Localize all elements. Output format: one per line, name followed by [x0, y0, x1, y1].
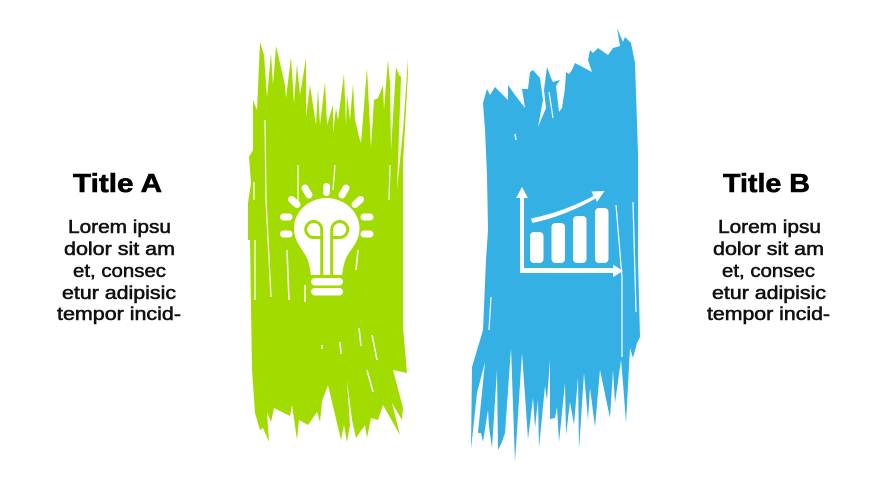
bulb rays [284, 186, 370, 234]
text block: Title B body [707, 217, 830, 324]
text block: Title A body: tempor incid- [57, 304, 181, 324]
brush scratches [254, 120, 390, 392]
panel: Title A text [57, 168, 181, 324]
heading: Title A: Title A [73, 168, 162, 198]
text block: Title B body: dolor sit am [713, 239, 824, 259]
text block: Title B body: etur adipisic [712, 283, 826, 303]
bulb body [294, 198, 360, 275]
panel: blue brush stroke [471, 28, 640, 462]
text block: Title B body: tempor incid- [707, 304, 830, 324]
vertical axis [516, 187, 623, 277]
text block: Title A body: dolor sit am [64, 239, 175, 259]
panel: Title B text [707, 168, 830, 324]
text block: Title A body [57, 217, 181, 324]
bulb base [311, 278, 343, 286]
text block: Title A body: Lorem ipsu [68, 217, 171, 237]
icon: growth bar chart [516, 187, 623, 277]
panel: green brush stroke [248, 42, 408, 442]
bulb filament [306, 222, 348, 275]
text block: Title B body: et, consec [722, 261, 815, 281]
heading: Title B: Title B [723, 168, 810, 198]
text block: Title B body: Lorem ipsu [718, 217, 821, 237]
bars [530, 208, 608, 263]
text block: Title A body: etur adipisic [62, 283, 176, 303]
icon: light bulb [284, 186, 370, 296]
trend arrow [531, 191, 604, 223]
text block: Title A body: et, consec [73, 261, 166, 281]
brush scratches [489, 92, 636, 357]
